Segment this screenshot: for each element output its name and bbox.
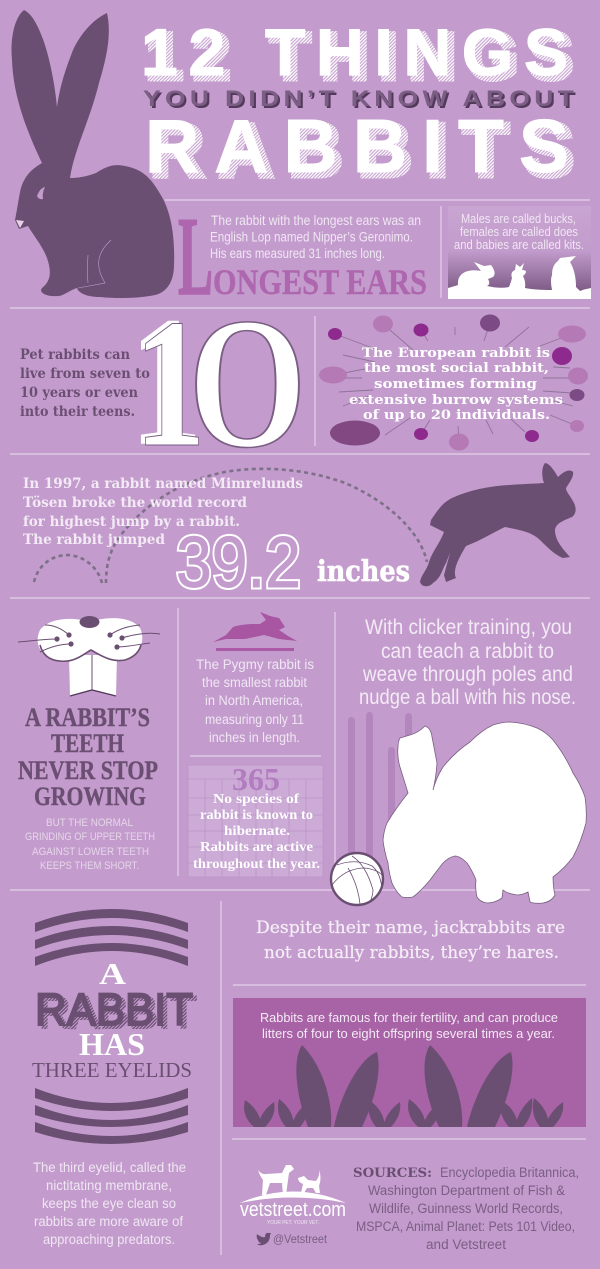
text: sources: [353, 1165, 579, 1252]
icon: pygmy rabbit: [213, 612, 297, 651]
big number 10: 1: [130, 279, 202, 483]
text: hibernation: throughout the year.: [193, 857, 320, 872]
text: hibernation: [193, 792, 320, 872]
heading: longest ears: [178, 195, 427, 319]
dashed jump path: [34, 469, 427, 583]
burrow diagram: [319, 314, 588, 450]
text: third eyelid: The third eyelid, called the: [33, 1160, 186, 1175]
fact: lifespan text: into their teens.: [20, 404, 135, 420]
icon: leaping rabbit: [420, 463, 576, 586]
text: pygmy rabbit: The Pygmy rabbit is: [196, 657, 314, 672]
heading: teeth never stop growing: GROWING: [34, 782, 146, 811]
icon: rabbit muzzle and teeth: [18, 616, 160, 696]
fact: lifespan text: [20, 347, 150, 420]
icon: rabbit ears: [244, 1045, 563, 1127]
heading: a rabbit has three eyelids: RABBIT: [39, 987, 197, 1038]
text: sources: MSPCA, Animal Planet: Pets 101 Video,: [356, 1219, 575, 1234]
text: names: [454, 212, 584, 252]
text: grinding teeth: [25, 817, 155, 872]
text: fertility: Rabbits are famous for their fertility, and can produce: [260, 1010, 558, 1025]
fact: longest ears text: [210, 213, 421, 261]
text: clicker training: weave through poles and: [362, 663, 573, 686]
text: third eyelid: keeps the eye clean so: [42, 1196, 176, 1211]
fact: longest ears text: English Lop named Nipper’s Geronimo.: [210, 230, 413, 244]
text: third eyelid: nictitating membrane,: [46, 1178, 172, 1193]
number: 365: 365: [232, 761, 280, 797]
fact: record jump text: for highest jump by a rabbit.: [23, 514, 240, 530]
text: sources: Wildlife, Guinness World Records,: [369, 1201, 563, 1216]
fact: lifespan text: Pet rabbits can: [20, 347, 130, 363]
fact: record jump text: In 1997, a rabbit named Mimrelunds: [23, 476, 303, 492]
text: pygmy rabbit: [196, 657, 314, 745]
title line: rabbits: RABBITS: [145, 104, 569, 188]
heading: a rabbit has three eyelids: [32, 956, 197, 1082]
text: grinding teeth: AGAINST LOWER TEETH: [32, 846, 149, 858]
text: jackrabbits: not actually rabbits, they’re hares.: [264, 943, 559, 963]
fact: longest ears text: His ears measured 31 inches long.: [210, 246, 385, 261]
text: clicker training: can teach a rabbit to: [381, 640, 554, 663]
fact: longest ears text: The rabbit with the longest ears was an: [211, 213, 421, 228]
text: grinding teeth: BUT THE NORMAL: [46, 817, 133, 829]
heading: teeth never stop growing: A RABBIT’S: [25, 703, 150, 732]
big number 10: 1: [134, 281, 206, 485]
title line: you didn't know about: YOU DIDN’T KNOW ABOUT: [145, 89, 576, 113]
heading: a rabbit has three eyelids: RABBIT: [35, 984, 193, 1035]
logo: vetstreet: YOUR PET. YOUR VET.: [267, 1220, 319, 1226]
text: european rabbit: [349, 346, 563, 423]
title: [141, 15, 576, 192]
text: grinding teeth: KEEPS THEM SHORT.: [40, 860, 139, 872]
heading: teeth never stop growing: NEVER STOP: [18, 756, 158, 785]
icon: three white rabbits: [448, 256, 591, 299]
text: fertility: litters of four to eight offspring several times a year.: [262, 1026, 555, 1041]
text: names: Males are called bucks,: [461, 212, 576, 226]
text: pygmy rabbit: in North America,: [205, 693, 303, 708]
panel: bucks does kits: [448, 206, 591, 299]
text: third eyelid: approaching predators.: [43, 1232, 175, 1247]
panel: fertility: [233, 998, 586, 1127]
number: 39.2 inches: 39.2: [176, 523, 301, 603]
heading: longest ears: L: [178, 195, 213, 319]
icon: top eyelid arcs: [35, 909, 188, 966]
text: hibernation: Rabbits are active: [200, 840, 313, 855]
text: pygmy rabbit: measuring only 11: [205, 712, 304, 727]
text: clicker training: nudge a ball with his nose.: [359, 686, 576, 709]
text: european rabbit: The European rabbit is: [362, 346, 550, 361]
heading: longest ears: ONGEST EARS: [213, 262, 427, 302]
weave poles: [348, 712, 412, 862]
text: pygmy rabbit: the smallest rabbit: [202, 675, 307, 690]
big number 10: 0: [188, 281, 307, 485]
icon: bottom eyelid arcs: [35, 1088, 188, 1144]
heading: a rabbit has three eyelids: HAS: [79, 1026, 145, 1062]
fact: lifespan text: live from seven to: [20, 366, 150, 382]
text: names: and babies are called kits.: [454, 238, 584, 252]
fact: record jump text: [23, 476, 303, 548]
text: third eyelid: [33, 1160, 186, 1247]
number: 39.2 inches: 39.2: [176, 523, 301, 603]
text: fertility: [260, 1010, 558, 1041]
fact: record jump text: The rabbit jumped: [23, 532, 165, 548]
text: jackrabbits: Despite their name, jackrabbits are: [256, 918, 565, 938]
logo: vetstreet: [240, 1165, 346, 1226]
text: third eyelid: rabbits are more aware of: [34, 1214, 183, 1229]
text: pygmy rabbit: inches in length.: [209, 730, 300, 745]
heading: teeth never stop growing: [18, 703, 158, 811]
fact: record jump text: Tösen broke the world record: [23, 495, 247, 511]
title line: 12 things: 12 THINGS: [146, 19, 573, 93]
text: european rabbit: the most social rabbit,: [364, 361, 549, 376]
text: sources: SOURCES:: [353, 1166, 432, 1181]
text: sources: and Vetstreet: [426, 1237, 506, 1252]
icon: large sitting rabbit: [12, 10, 174, 298]
panel: calendar hibernate: [188, 761, 323, 877]
text: hibernation: No species of: [213, 792, 299, 807]
text: sources: Encyclopedia Britannica,: [440, 1165, 579, 1180]
text: names: females are called does: [460, 225, 578, 239]
text: european rabbit: of up to 20 individuals.: [363, 408, 550, 423]
text: hibernation: rabbit is known to: [200, 808, 313, 823]
number: 39.2 inches: inches: [317, 554, 410, 588]
text: hibernation: hibernate.: [224, 824, 290, 839]
text: european rabbit: extensive burrow systems: [349, 393, 563, 408]
title line: 12 things: 12 THINGS: [141, 15, 568, 89]
heading: a rabbit has three eyelids: A: [99, 956, 127, 991]
icon: ball: [331, 853, 383, 905]
text: clicker training: With clicker training, you: [365, 616, 572, 639]
icon: white rabbit with ball: [331, 722, 586, 905]
heading: teeth never stop growing: TEETH: [51, 729, 124, 758]
twitter handle: @Vetstreet: [273, 1232, 328, 1246]
logo: vetstreet: vetstreet.com: [240, 1199, 346, 1221]
big number 10: [130, 279, 307, 485]
text: clicker training: [359, 616, 576, 709]
title line: you didn't know about: YOU DIDN’T KNOW ABOUT: [143, 87, 574, 111]
text: grinding teeth: GRINDING OF UPPER TEETH: [25, 831, 155, 843]
fact: lifespan text: 10 years or even: [20, 385, 138, 401]
text: sources: Washington Department of Fish &: [368, 1183, 565, 1198]
text: european rabbit: sometimes forming: [374, 377, 537, 392]
number: 39.2 inches: [176, 523, 410, 603]
heading: a rabbit has three eyelids: THREE EYELIDS: [32, 1058, 192, 1082]
title line: rabbits: RABBITS: [150, 108, 574, 192]
text: jackrabbits: [256, 918, 565, 963]
